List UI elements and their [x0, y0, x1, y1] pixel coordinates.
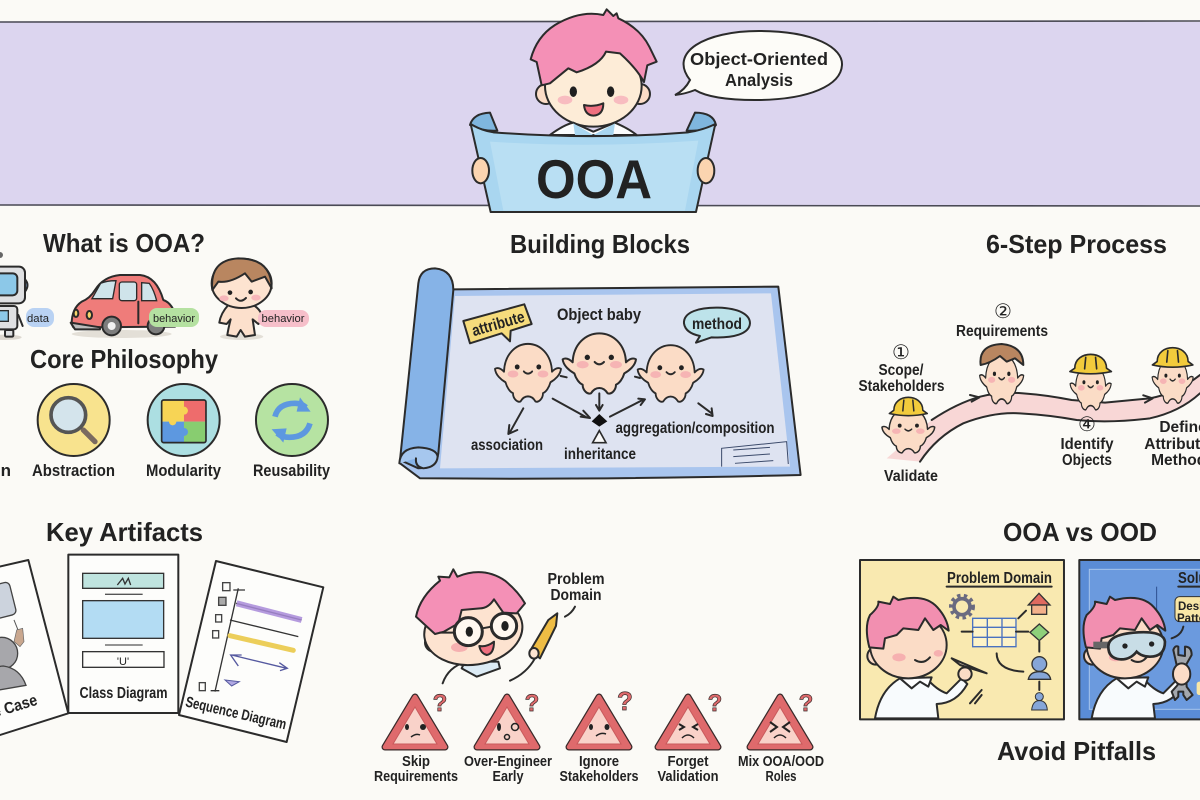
step 2 label: ② [994, 301, 1012, 323]
speech bubble: Object-Oriented Analysis [675, 31, 842, 100]
card: class diagram [68, 555, 178, 713]
label: Problem Domain: Problem [548, 571, 604, 588]
label: method: method [692, 316, 742, 333]
icon: cycle arrows [256, 384, 328, 456]
panel: what is OOA objects [0, 252, 309, 340]
pitfall: Forget Validation: Forget [668, 754, 709, 770]
step 2 label [956, 301, 1048, 340]
step 4 label: Identify [1060, 436, 1114, 453]
panel: modularity: Modularity [146, 461, 221, 480]
icon: puzzle [148, 384, 220, 456]
icon: robot [0, 252, 27, 340]
label: Validate: Validate [884, 468, 938, 485]
pitfall: Over-Engineer Early: Early [492, 769, 524, 785]
pitfall: Over-Engineer Early: Over-Engineer [464, 754, 552, 770]
icon: magnifier [38, 384, 110, 456]
step 1 label [858, 342, 944, 395]
heading: Key Artifacts: Key Artifacts [46, 517, 203, 547]
heading: Building Blocks: Building Blocks [510, 229, 690, 259]
panel: abstraction [32, 384, 115, 480]
heading: Core Philosophy: Core Philosophy [30, 344, 218, 374]
label: data [26, 308, 54, 327]
panel: reusability [253, 384, 330, 480]
pitfall: Mix OOA/OOD Roles: ? [799, 690, 813, 717]
step 1 label: Stakeholders [858, 378, 944, 395]
pitfall: Mix OOA/OOD Roles [738, 690, 824, 785]
pitfall: Mix OOA/OOD Roles: Mix OOA/OOD [738, 754, 824, 770]
panel: modularity [146, 384, 221, 480]
heading: 6-Step Process: 6-Step Process [986, 229, 1167, 259]
panel: problem domain comic [860, 560, 1064, 719]
panel: solution domain comic [1079, 560, 1200, 719]
pitfall: Forget Validation: Validation [658, 769, 718, 785]
pitfall: Over-Engineer Early [464, 690, 552, 785]
card: class diagram: 'U' [117, 656, 129, 668]
heading: OOA vs OOD: OOA vs OOD [1003, 517, 1157, 547]
panel: key artifacts [0, 555, 323, 747]
label: inheritance: inheritance [564, 446, 636, 463]
step 1 label: ① [892, 342, 910, 364]
pitfall: Over-Engineer Early: ? [525, 690, 539, 717]
panel: blueprint [399, 268, 801, 479]
scroll title: OOA [536, 148, 652, 210]
step 1 label: Scope/ [878, 362, 924, 379]
pitfall: Skip Requirements [374, 690, 458, 785]
pitfall: Ignore Stakeholders: ? [617, 686, 633, 716]
pitfall: Ignore Stakeholders: Ignore [579, 754, 619, 770]
banner [0, 21, 1200, 206]
label: behavior car: behavior [153, 313, 195, 325]
babies on path [882, 344, 1193, 453]
speech bubble: Object-Oriented Analysis: Analysis [725, 70, 793, 90]
label: Object baby: Object baby [557, 305, 641, 324]
icon: baby [212, 258, 272, 340]
panel: pitfalls developer character: Domain [550, 587, 602, 604]
label: behavior car [149, 308, 199, 327]
label: association: association [471, 437, 543, 454]
hero character holding OOA scroll [470, 9, 716, 212]
step label: Define Attributes Methods [1144, 419, 1200, 469]
step 2 label: Requirements [956, 323, 1048, 340]
step 4 label: Objects [1062, 452, 1112, 469]
panel: pitfalls row [374, 686, 824, 785]
pitfall: Mix OOA/OOD Roles: Roles [766, 769, 796, 785]
pitfall: Skip Requirements: Requirements [374, 769, 458, 785]
pitfall: Ignore Stakeholders [560, 686, 638, 785]
panel: reusability: Reusability [253, 461, 330, 480]
card: sequence diagram: Sequence Diagram [184, 694, 288, 733]
pitfall: Forget Validation: ? [708, 690, 722, 717]
label: Design Patterns [1177, 601, 1200, 625]
card: class diagram: Class Diagram [80, 685, 168, 702]
step 4 label [1060, 414, 1114, 469]
speech bubble: Object-Oriented Analysis: Object-Oriented [690, 49, 828, 69]
heading: Avoid Pitfalls: Avoid Pitfalls [997, 736, 1156, 766]
pitfall: Ignore Stakeholders: Stakeholders [560, 769, 638, 785]
pitfall: Skip Requirements: ? [433, 690, 447, 717]
pitfall: Forget Validation [658, 690, 722, 785]
label: aggregation/composition: aggregation/composition [616, 420, 774, 437]
panel: pitfalls developer character [416, 569, 604, 683]
icon: car [71, 275, 177, 338]
heading: What is OOA?: What is OOA? [43, 228, 205, 258]
pitfall: Skip Requirements: Skip [402, 754, 430, 770]
panel: process path [858, 301, 1200, 485]
step 4 label: ④ [1078, 414, 1096, 436]
label: behavior baby [258, 310, 309, 327]
label: data: data [27, 313, 50, 325]
label: behavior baby: behavior [262, 313, 305, 325]
panel: abstraction: Abstraction [32, 461, 115, 480]
panel: problem domain comic: Problem Domain [947, 570, 1052, 587]
label: attribute: attribute [470, 309, 527, 340]
card: use case [0, 560, 68, 747]
card: sequence diagram [179, 561, 323, 742]
